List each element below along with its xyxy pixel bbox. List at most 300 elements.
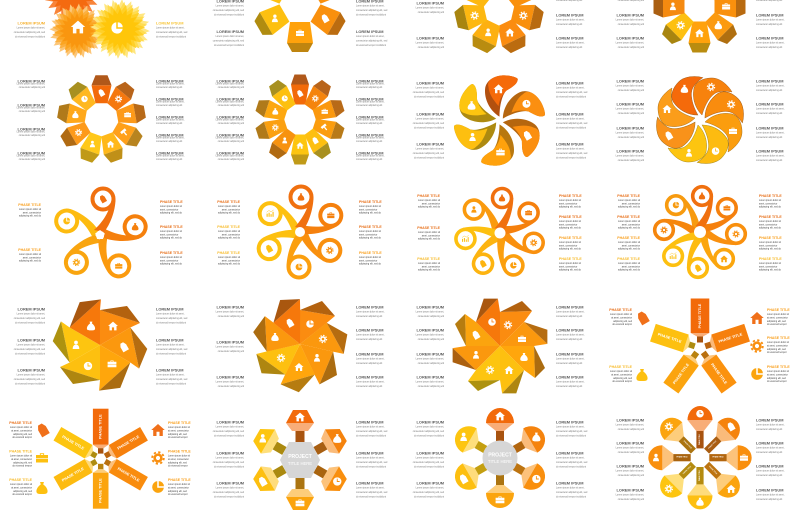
text block: PHASE TITLE [759,215,782,219]
text block: adipiscing elit, sed do [418,206,441,209]
text block [559,236,582,251]
text block [356,328,385,341]
text block: PHASE TITLE [168,450,191,454]
text block [556,328,585,341]
text block [216,132,244,143]
text block: consectetur adipiscing elit [556,315,583,318]
text block: Lorem ipsum dolor sit amet, [356,101,385,104]
text block: Lorem ipsum dolor sit [168,454,190,458]
text block: PHASE TITLE [767,365,790,369]
text block: Lorem ipsum dolor sit amet, [416,358,444,361]
text block [759,194,782,209]
text block: consectetur adipiscing elit [556,46,583,49]
text block: LOREM IPSUM [417,142,444,146]
text block: consectetur adipiscing elit [618,451,644,454]
text block: Lorem ipsum dolor sit amet, [416,7,444,10]
icon: pie [111,22,123,34]
text block [216,114,244,125]
text block [213,420,245,438]
text block: adipiscing elit, sed do [559,206,582,209]
text block: Lorem ipsum dolor sit amet, [416,148,444,151]
text block [413,142,445,160]
text block: LOREM IPSUM [556,374,583,380]
text block [759,257,782,272]
text block: consectetur adipiscing elit, sed [156,348,188,351]
text block: LOREM IPSUM [18,150,45,156]
text block: consectetur adipiscing elit [218,140,244,143]
panel: eight curl arms [617,187,782,277]
text block [9,478,33,496]
spokes [648,406,752,509]
text block: PHASE TITLE [359,225,382,229]
panel: six pencils [9,409,191,509]
text block: Lorem ipsum dolor sit amet, [616,42,644,45]
text block [168,450,191,468]
text block: PHASE TITLE [168,421,191,425]
text block [616,102,644,115]
text block: amet, consectetur [759,265,777,268]
text block: PHASE TITLE [759,236,782,240]
panel: eight bulb spokes [616,406,785,509]
text block [17,78,45,89]
text block [217,251,241,266]
text block: do eiusmod tempor incididunt [214,44,244,47]
text block: Lorem ipsum dolor sit amet, [156,344,185,347]
text block: amet, consectetur [160,259,178,262]
text block: adipiscing elit, sed do [559,227,582,230]
text block: PHASE TITLE [559,215,582,219]
spokes [450,408,550,508]
text block: Lorem ipsum dolor sit amet, [756,447,785,450]
pencils: PHASE TITLE [117,435,141,451]
text block: Lorem ipsum dolor sit amet, [756,470,785,473]
text block: consectetur adipiscing elit [218,158,244,161]
text block: Lorem ipsum dolor sit [359,230,381,233]
text block [359,200,382,215]
text block [168,478,191,496]
text block: Lorem ipsum dolor sit amet, [356,311,385,314]
text block: amet, consectetur [422,234,440,237]
text block: do eiusmod tempor incididunt [15,353,45,356]
panel: seven petal wheel [416,0,585,55]
text block: LOREM IPSUM [756,418,783,422]
text block [413,80,445,99]
text block: do eiusmod tempor incididunt [556,496,586,499]
text block: Lorem ipsum dolor sit [559,220,581,223]
text block: Lorem ipsum dolor sit [618,220,640,223]
text block: consectetur adipiscing elit [218,104,244,107]
text block: amet, consectetur [759,202,777,205]
icon: house [151,424,165,436]
text block: do eiusmod tempor incididunt [356,435,386,438]
text block [156,150,185,161]
text block: Lorem ipsum dolor sit amet, [556,334,585,337]
text block: consectetur adipiscing elit [356,338,383,341]
text block [417,194,441,209]
text block: Lorem ipsum dolor sit amet, [216,346,244,349]
text block: amet, consectetur [222,259,240,262]
text block [160,251,183,266]
text block: LOREM IPSUM [556,352,583,356]
pencils [650,298,750,394]
text block [416,0,444,14]
text block: consectetur adipiscing elit [19,158,45,161]
text block: adipiscing elit, sed do [19,260,42,263]
text block [767,308,790,326]
text block: LOREM IPSUM [617,148,644,154]
text block: Lorem ipsum dolor sit amet, [216,487,244,490]
hub: project title: TITLE HERE [488,459,512,464]
text block: amet, consectetur [222,233,240,236]
text block [14,20,46,39]
text block: LOREM IPSUM [617,126,644,130]
text block [616,488,644,501]
text block: consectetur adipiscing elit, sed [556,430,588,433]
text block: consectetur adipiscing elit [218,350,244,353]
text block [617,194,641,209]
text block: PHASE TITLE [617,257,641,261]
text block: adipiscing elit, sed do [759,227,782,230]
text block: Lorem ipsum dolor sit amet, [156,137,185,140]
text block: Lorem ipsum dolor sit [418,231,440,234]
text block: Lorem ipsum dolor sit amet, [416,118,444,121]
text block: Lorem ipsum dolor sit amet, [356,457,385,460]
text block: Lorem ipsum dolor sit amet, [416,334,444,337]
icon: gear [751,340,763,352]
text block: consectetur adipiscing elit [418,338,444,341]
text block [156,368,188,386]
text block: consectetur adipiscing elit [156,86,183,89]
text block: Lorem ipsum dolor sit amet, [216,83,244,86]
text block: do eiusmod tempor incididunt [156,383,186,386]
text block: Lorem ipsum dolor sit amet, [356,83,385,86]
text block: Lorem ipsum dolor sit amet, [216,5,244,8]
text block: Lorem ipsum dolor sit amet, [556,19,585,22]
text block: consectetur adipiscing elit [618,428,644,431]
text block [416,36,444,49]
text block: consectetur adipiscing elit, sed [213,430,245,433]
panel: seven wedge pinwheel [216,290,385,398]
text block: LOREM IPSUM [556,112,583,116]
text block [356,0,388,17]
spokes: PHASE TITLE [698,469,701,481]
text block: consectetur adipiscing elit [756,136,783,139]
text block: consectetur adipiscing elit [418,46,444,49]
text block: consectetur adipiscing elit [19,86,45,89]
text block: PHASE TITLE [759,257,782,261]
text block [14,306,46,325]
text block [617,215,641,230]
text block: Lorem ipsum dolor sit amet, [556,311,585,314]
text block: Lorem ipsum dolor sit amet, [556,457,585,460]
text block [556,112,588,130]
text block: LOREM IPSUM [217,78,244,84]
text block: at amet, consectetur [11,429,32,432]
text block: amet, consectetur [23,211,41,214]
text block: LOREM IPSUM [617,102,644,106]
text block: PHASE TITLE [217,225,241,229]
text block: adipiscing elit, sed do [618,206,641,209]
text block: consectetur adipiscing elit [356,315,383,318]
pencils [53,409,148,509]
text block [216,150,244,161]
text block: amet, consectetur [160,208,178,211]
text block: Lorem ipsum dolor sit amet, [216,381,244,384]
text block: Lorem ipsum dolor sit [610,313,632,316]
text block: consectetur adipiscing elit, sed [213,9,245,12]
text block: Lorem ipsum dolor sit [559,241,581,244]
text block: Lorem ipsum dolor sit amet, [356,334,385,337]
text block: Lorem ipsum dolor sit amet, [756,19,785,22]
text block: LOREM IPSUM [617,418,644,422]
text block: LOREM IPSUM [156,338,183,342]
icon: tag [636,310,650,325]
text block: LOREM IPSUM [756,126,783,130]
text block: at amet, consectetur [767,373,788,376]
curls [655,187,745,277]
text block: LOREM IPSUM [417,328,444,332]
text block: adipiscing elit, sed [13,433,33,436]
text block: LOREM IPSUM [156,150,183,156]
text block: Lorem ipsum dolor sit amet, [17,155,45,158]
text block: LOREM IPSUM [356,29,383,34]
text block: do eiusmod tempor incididunt [156,36,186,39]
text block: at amet, consectetur [168,429,189,432]
text block: Lorem ipsum dolor sit [610,370,632,373]
text block: LOREM IPSUM [356,304,383,310]
pencils: PHASE TITLE [718,332,743,344]
pencils: PHASE TITLE [99,414,103,439]
text block: adipiscing elit, sed [168,461,187,464]
text block: consectetur adipiscing elit [556,0,583,2]
text block: consectetur adipiscing elit, sed [556,491,588,494]
text block: LOREM IPSUM [756,78,783,84]
text block: amet, consectetur [160,233,178,236]
spokes: PHASE TITLE [677,456,688,459]
text block: amet, consectetur [359,259,377,262]
splash shapes [42,0,152,61]
text block: consectetur adipiscing elit [756,89,783,92]
text block: LOREM IPSUM [356,96,383,102]
text block [356,96,385,107]
panel: five pencils [609,298,790,394]
text block: Lorem ipsum dolor sit amet, [156,313,185,316]
text block: consectetur adipiscing elit, sed [413,461,445,464]
text block: consectetur adipiscing elit [19,110,45,113]
text block: LOREM IPSUM [217,29,244,34]
panel: eight petal wheel [616,0,785,53]
text block: do eiusmod tempor [767,323,787,326]
text block: Lorem ipsum dolor sit [10,483,32,486]
text block: Lorem ipsum dolor sit amet, [756,155,785,158]
text block: consectetur adipiscing elit [156,158,183,161]
text block: Lorem ipsum dolor sit [218,205,240,208]
text block: Lorem ipsum dolor sit [359,205,381,208]
text block: Lorem ipsum dolor sit amet, [17,83,45,86]
text block: amet, consectetur [359,233,377,236]
text block: PHASE TITLE [9,450,33,454]
text block [617,257,641,272]
text block: LOREM IPSUM [356,450,383,456]
text block: do eiusmod tempor [612,323,632,326]
text block: PHASE TITLE [18,203,42,207]
text block: Lorem ipsum dolor sit [359,256,381,259]
text block [759,236,782,251]
text block: consectetur adipiscing elit [218,315,244,318]
text block: Lorem ipsum dolor sit [759,220,781,223]
panel: five curl arms [18,188,183,282]
text block: Lorem ipsum dolor sit amet, [17,344,45,347]
text block: Lorem ipsum dolor sit amet, [556,487,585,490]
text block: adipiscing elit, sed do [218,237,241,240]
text block: consectetur adipiscing elit, sed [413,122,445,125]
text block: Lorem ipsum dolor sit amet, [616,19,644,22]
text block: consectetur adipiscing elit, sed [356,40,388,43]
text block: PHASE TITLE [617,194,641,198]
text block: do eiusmod tempor incididunt [356,466,386,469]
text block [356,78,385,89]
text block: consectetur adipiscing elit [618,89,644,92]
text block: PHASE TITLE [609,308,633,312]
text block: Lorem ipsum dolor sit amet, [216,101,244,104]
text block [9,450,33,468]
text block [160,225,183,240]
text block: do eiusmod tempor [767,351,787,354]
text block: adipiscing elit, sed do [218,263,241,266]
panel: circle hub [413,408,588,508]
text block: consectetur adipiscing elit [418,315,444,318]
pencils: PHASE TITLE [99,478,103,503]
text block: PHASE TITLE [417,194,441,198]
text block [216,374,244,388]
text block [356,132,385,143]
text block [156,96,185,107]
text block [616,418,644,431]
text block: amet, consectetur [622,265,640,268]
text block: Lorem ipsum dolor sit [10,426,32,429]
text block: LOREM IPSUM [617,464,644,468]
text block: LOREM IPSUM [356,328,383,332]
text block [160,200,183,215]
text block: Lorem ipsum dolor sit amet, [416,42,444,45]
text block: Lorem ipsum dolor sit amet, [17,374,45,377]
text block [756,464,785,477]
text block: consectetur adipiscing elit [618,474,644,477]
text block: adipiscing elit, sed do [759,206,782,209]
text block: consectetur adipiscing elit, sed [213,491,245,494]
text block: Lorem ipsum dolor sit [759,262,781,265]
text block: Lorem ipsum dolor sit amet, [556,381,585,384]
pencils: PHASE TITLE [672,362,690,385]
text block: PHASE TITLE [9,478,33,482]
text block: consectetur adipiscing elit [156,104,183,107]
text block: consectetur adipiscing elit, sed [14,317,46,320]
text block: LOREM IPSUM [417,352,444,356]
text block: PHASE TITLE [160,200,183,204]
text block: Lorem ipsum dolor sit amet, [616,155,644,158]
text block: Lorem ipsum dolor sit [618,241,640,244]
panel: eight blade swirl [616,68,785,172]
icon: tag [36,422,50,437]
text block: at amet, consectetur [11,458,32,461]
text block: adipiscing elit, sed do [618,269,641,272]
text block: Lorem ipsum dolor sit amet, [616,447,644,450]
text block: consectetur adipiscing elit [156,140,183,143]
text block: Lorem ipsum dolor sit amet, [216,119,244,122]
text block: PHASE TITLE [168,478,191,482]
text block: LOREM IPSUM [18,338,45,342]
text block: adipiscing elit, sed do [418,238,441,241]
text block: do eiusmod tempor incididunt [356,14,386,17]
text block: adipiscing elit, sed [767,348,786,351]
hub: project title [482,440,518,476]
text block: LOREM IPSUM [556,328,583,332]
text block: LOREM IPSUM [417,0,444,6]
hub: project title: PROJECT [488,452,512,458]
text block: Lorem ipsum dolor sit amet, [356,426,385,429]
text block: LOREM IPSUM [156,78,183,84]
icon: pie [152,481,164,493]
text block: do eiusmod tempor incididunt [15,383,45,386]
text block: consectetur adipiscing elit [356,86,383,89]
panel: ten petal wheel [216,74,385,164]
text block [417,226,441,241]
text block [213,29,245,47]
text block: LOREM IPSUM [356,78,383,84]
spokes: PHASE TITLE [698,433,701,445]
text block: Lorem ipsum dolor sit amet, [756,42,785,45]
text block: PHASE TITLE [217,251,241,255]
text block: LOREM IPSUM [356,374,383,380]
icon: briefcase [36,453,48,462]
text block: consectetur adipiscing elit, sed [156,317,188,320]
text block: LOREM IPSUM [156,20,183,26]
text block: Lorem ipsum dolor sit amet, [216,35,244,38]
text block: Lorem ipsum dolor sit amet, [356,35,385,38]
text block: amet, consectetur [622,223,640,226]
text block: LOREM IPSUM [556,304,583,310]
text block: PHASE TITLE [9,421,33,425]
text block: Lorem ipsum dolor sit amet, [416,487,444,490]
text block: Lorem ipsum dolor sit amet, [756,494,785,497]
icon: house [750,312,764,324]
text block: Lorem ipsum dolor sit amet, [156,155,185,158]
text block: Lorem ipsum dolor sit amet, [416,381,444,384]
text block: LOREM IPSUM [217,132,244,138]
petal wheel [254,74,346,164]
text block: consectetur adipiscing elit [556,385,583,388]
text block [616,148,644,162]
text block: consectetur adipiscing elit, sed [556,152,588,155]
text block: LOREM IPSUM [417,420,444,424]
text block: do eiusmod tempor incididunt [414,466,444,469]
text block: Lorem ipsum dolor sit amet, [556,148,585,151]
text block: Lorem ipsum dolor sit [160,230,182,233]
text block: adipiscing elit, sed do [160,212,183,215]
icon: money bag [36,482,48,494]
text block: PHASE TITLE [559,236,582,240]
text block [616,464,644,477]
text block: consectetur adipiscing elit [756,46,783,49]
text block: LOREM IPSUM [156,96,183,102]
text block: Lorem ipsum dolor sit [160,256,182,259]
text block [213,480,245,499]
panel: six curl arms [217,186,382,278]
text block: adipiscing elit, sed do [418,269,441,272]
text block [213,450,245,469]
text block: LOREM IPSUM [756,464,783,468]
text block: do eiusmod tempor incididunt [556,157,586,160]
